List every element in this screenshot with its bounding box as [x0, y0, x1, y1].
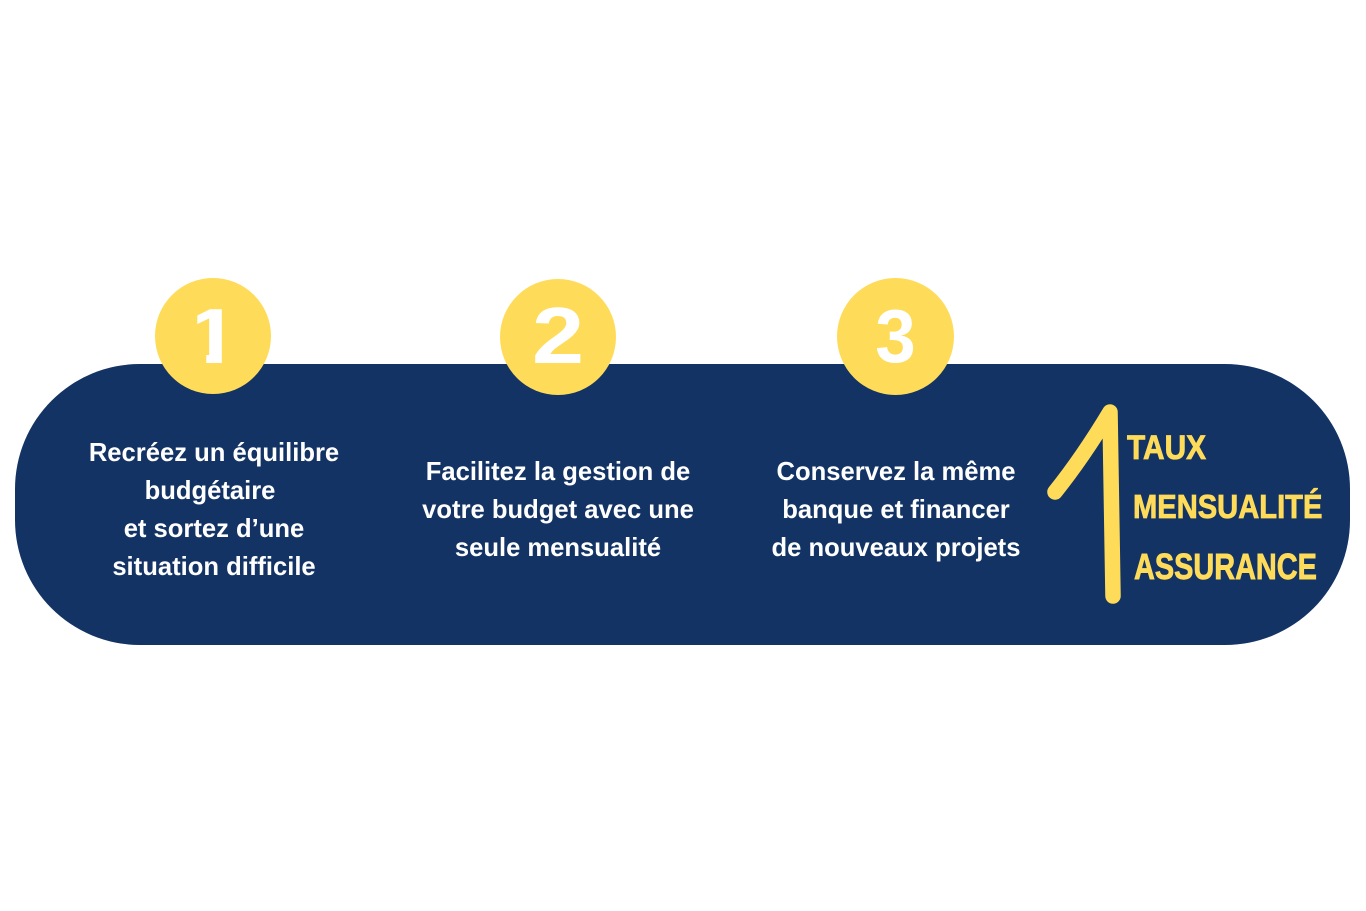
text block: step 3: Conservez la même [776, 458, 1016, 486]
text block: step 2: Facilitez la gestion de [426, 458, 690, 486]
panel: navy band [15, 364, 1350, 645]
text block: step 3: banque et financer [782, 496, 1010, 524]
number badge 3 [837, 278, 954, 395]
number badge 3: 3 [875, 294, 916, 378]
text block: step 1 [89, 439, 339, 581]
number badge 1 [155, 278, 271, 394]
text block: step 1: budgétaire [145, 477, 275, 505]
text block: step 2 [422, 458, 694, 562]
label: taux: TAUX [1127, 427, 1206, 466]
text block: step 1: situation difficile [112, 553, 316, 581]
text block: step 3 [772, 458, 1020, 562]
number badge 2: 2 [532, 291, 584, 380]
text block: step 1: Recréez un équilibre [89, 439, 339, 467]
label: assurance: ASSURANCE [1134, 546, 1317, 586]
text block: step 2: votre budget avec une [422, 496, 694, 524]
number badge 1: 1 [185, 292, 242, 380]
text block: step 1: et sortez d’une [124, 515, 304, 543]
number badge 2 [500, 279, 616, 395]
label: mensualité: MENSUALITÉ [1133, 487, 1322, 525]
icon: hand-drawn number one [1047, 404, 1121, 604]
text block: step 2: seule mensualité [455, 534, 661, 562]
text block: step 3: de nouveaux projets [772, 534, 1020, 562]
